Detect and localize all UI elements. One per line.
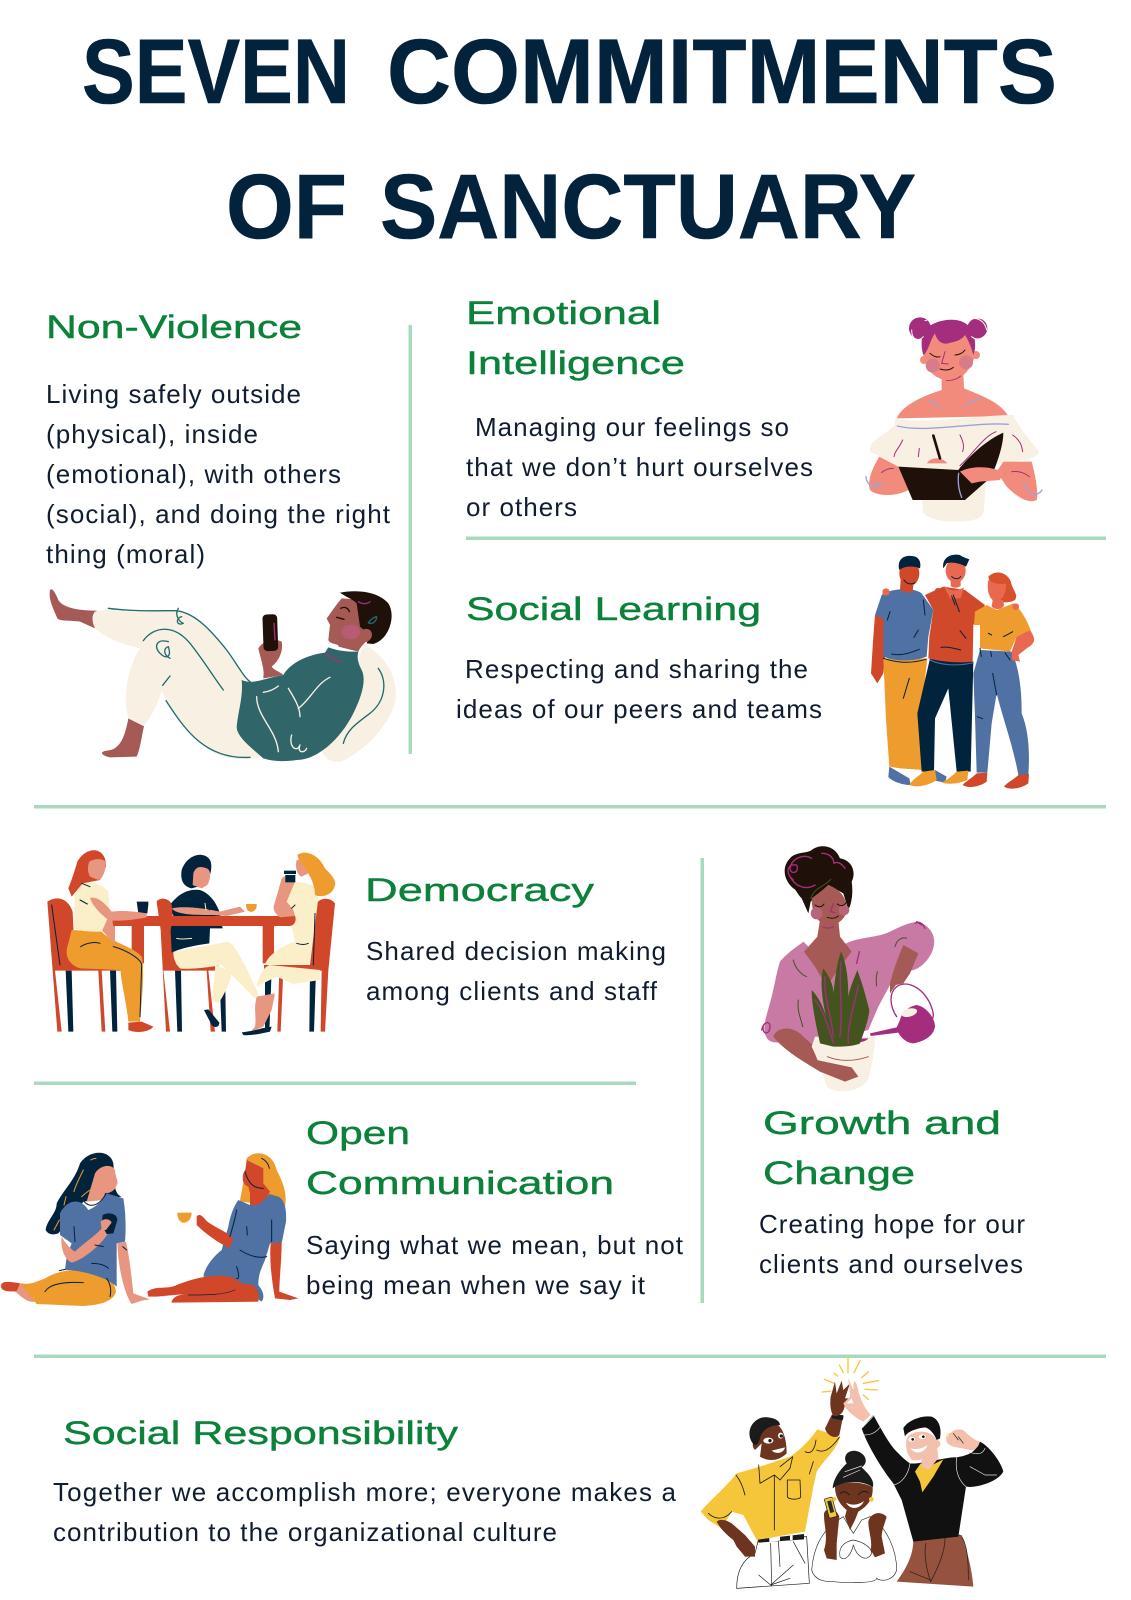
text block: emotional intelligence xyxy=(466,412,813,522)
heading: growth and change: Change xyxy=(763,1155,915,1191)
heading: non-violence: Non-Violence xyxy=(46,309,302,345)
heading: growth and change xyxy=(763,1105,1001,1191)
text block: social learning: Respecting and sharing the xyxy=(465,654,808,684)
icon: person reclining with phone xyxy=(50,589,396,762)
panel: democracy xyxy=(47,850,666,1035)
text block: growth and change xyxy=(759,1209,1025,1279)
text block: non-violence: Living safely outside xyxy=(46,379,301,409)
text block: emotional intelligence: that we don’t hurt ourselves xyxy=(466,452,813,482)
title: SEVEN xyxy=(82,21,350,123)
heading: social learning: Social Learning xyxy=(466,591,761,627)
heading: open communication: Open xyxy=(306,1115,410,1151)
text block: social responsibility: Together we accomplish more; everyone makes a xyxy=(53,1477,677,1507)
text block: emotional intelligence: Managing our feelings so xyxy=(475,412,789,442)
heading: growth and change: Growth and xyxy=(763,1105,1001,1141)
title: OF xyxy=(226,156,347,258)
icon: woman watering a plant xyxy=(762,846,935,1091)
panel: non-violence xyxy=(46,309,396,762)
icon: three friends standing xyxy=(871,555,1034,789)
text block: democracy: Shared decision making xyxy=(366,936,666,966)
text block: non-violence xyxy=(46,379,391,569)
text block: social responsibility xyxy=(53,1477,677,1547)
heading: democracy: Democracy xyxy=(365,872,594,908)
heading: social responsibility: Social Responsibility xyxy=(63,1415,458,1451)
text block: social learning xyxy=(456,654,822,724)
heading: open communication xyxy=(306,1115,614,1201)
text block: non-violence: thing (moral) xyxy=(46,539,205,569)
heading: emotional intelligence xyxy=(466,295,685,381)
panel: social learning xyxy=(456,555,1034,789)
title xyxy=(82,21,1057,258)
panel: open communication xyxy=(1,1115,684,1306)
icon: three colleagues high-fiving xyxy=(701,1357,1003,1588)
text block: non-violence: (emotional), with others xyxy=(46,459,341,489)
panel: emotional intelligence xyxy=(466,295,1042,522)
icon: three women at a table xyxy=(47,850,335,1035)
text block: emotional intelligence: or others xyxy=(466,492,577,522)
text block: growth and change: clients and ourselves xyxy=(759,1249,1023,1279)
text block: open communication: Saying what we mean, but not xyxy=(306,1230,684,1260)
panel: growth and change xyxy=(759,846,1025,1279)
heading: open communication: Communication xyxy=(306,1165,614,1201)
title: COMMITMENTS xyxy=(387,21,1057,123)
text block: growth and change: Creating hope for our xyxy=(759,1209,1025,1239)
text block: democracy xyxy=(366,936,666,1006)
text block: non-violence: (physical), inside xyxy=(46,419,258,449)
text block: democracy: among clients and staff xyxy=(366,976,658,1006)
panel: social responsibility xyxy=(53,1357,1003,1588)
heading: emotional intelligence: Intelligence xyxy=(466,345,685,381)
icon: woman writing in notebook xyxy=(866,317,1042,522)
text block: non-violence: (social), and doing the right xyxy=(46,499,391,529)
icon: two women sitting with cups xyxy=(1,1153,298,1306)
text block: social learning: ideas of our peers and teams xyxy=(456,694,822,724)
text block: open communication: being mean when we say it xyxy=(306,1270,646,1300)
text block: open communication xyxy=(306,1230,684,1300)
title: SANCTUARY xyxy=(380,156,916,258)
heading: emotional intelligence: Emotional xyxy=(466,295,661,331)
text block: social responsibility: contribution to the organizational culture xyxy=(53,1517,557,1547)
